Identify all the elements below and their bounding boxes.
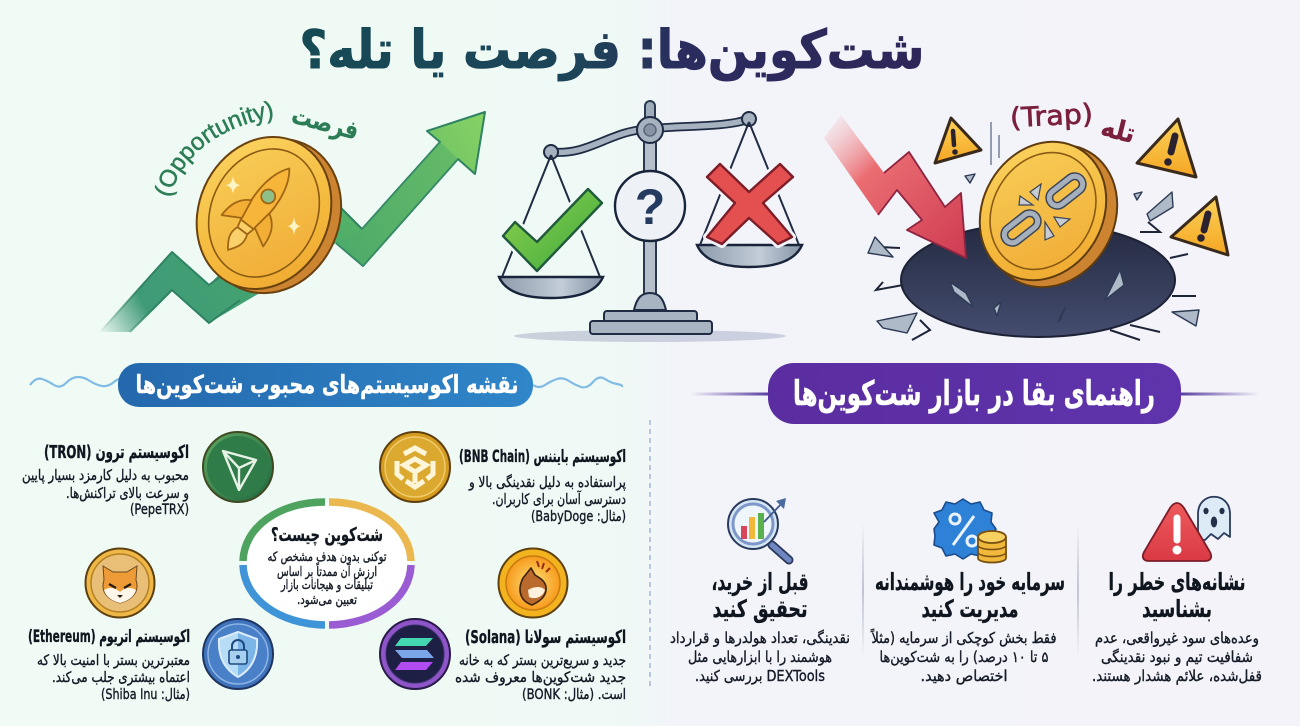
text: tron: محبوب به دلیل کارمزد بسیار پایین <box>22 468 189 484</box>
icon: ethereum shield coin <box>203 619 273 689</box>
right pan <box>697 245 802 267</box>
panel: manage capital: سرمایه خود را هوشمندانه <box>875 568 1065 596</box>
icon: bonk coin <box>498 548 568 618</box>
panel: manage capital: ۵ تا ۱۰ درصد) را به شت‌کوین‌ها <box>880 648 1048 666</box>
panel: recognize danger signs: وعده‌های سود غیرواقعی، عدم <box>1095 629 1259 647</box>
panel: what is a shitcoin: تبلیقات و هیجانات بازار <box>280 578 373 593</box>
panel: research before buying <box>670 498 850 685</box>
label: opportunity <box>154 100 362 196</box>
panel: what is a shitcoin: ارزش آن ممدتاً بر اساس <box>277 562 377 580</box>
icon: red cross <box>707 164 793 244</box>
icon: warning triangle 1 <box>935 118 981 163</box>
icon: danger triangle and ghost <box>1143 497 1230 561</box>
icon: balance scale with check, question and cross <box>499 101 802 342</box>
text: solana: جدید و سریع‌ترین بستر که به خانه <box>459 653 626 669</box>
icon: percent badge and coins <box>934 499 1006 562</box>
panel: what is a shitcoin: شت‌کوین چیست؟ <box>271 524 383 546</box>
text: ethereum: اکوسیستم اتریوم (Ethereum) <box>28 627 190 647</box>
heading: ecosystem map: نقشه اکوسیستم‌های محبوب شت‌کوین‌ها <box>136 370 518 400</box>
text: bnb: پراستفاده به دلیل نقدینگی بالا و <box>468 474 626 491</box>
icon: dark cracked hole <box>876 222 1196 340</box>
panel: manage capital: مدیریت کنید <box>922 595 1018 623</box>
text: ethereum: اعتماه بیشتری جلب می‌کند. <box>52 670 190 686</box>
icon: warning triangle 2 <box>1137 119 1196 177</box>
panel: opportunity illustration <box>100 100 486 333</box>
icon: tron coin <box>203 432 273 502</box>
panel: recognize danger signs <box>1092 497 1262 685</box>
icon: warning triangle 3 <box>1171 197 1228 255</box>
icon: rising green arrow <box>100 112 485 332</box>
text: tron: (PepeTRX) <box>130 502 189 518</box>
text: solana <box>455 627 626 703</box>
text: tron: اکوسیستم ترون (TRON) <box>44 442 189 463</box>
pan strings <box>502 122 799 277</box>
heading: ecosystem map <box>30 363 622 407</box>
panel: what is a shitcoin: توکنی بدون هدف مشخص که <box>268 550 387 565</box>
panel: recognize danger signs: قفل‌شده، علائم هشدار هستند. <box>1092 667 1262 685</box>
text: tron <box>22 442 189 518</box>
broken chain <box>1001 173 1086 246</box>
title: شت‌کوین‌ها: فرصت یا تله؟ <box>300 20 924 81</box>
icon: check mark <box>503 189 602 271</box>
icon: solana coin <box>380 619 450 689</box>
panel: research before buying: قبل از خرید، <box>712 568 808 596</box>
label: opportunity: فرصت <box>288 100 362 147</box>
scale beam <box>551 119 749 152</box>
icon: shards <box>868 174 1199 333</box>
scale pole <box>644 120 656 300</box>
text: solana: است. (مثال: BONK) <box>522 687 626 703</box>
panel: what is a shitcoin <box>243 502 411 625</box>
scale base <box>590 293 712 334</box>
heading: survival guide <box>690 363 1259 424</box>
text: bnb <box>459 447 626 525</box>
panel: research before buying: نقدینگی، تعداد هولدرها و قرارداد <box>670 629 850 647</box>
panel: manage capital: فقط بخش کوچکی از سرمایه (مثلاً <box>870 628 1056 647</box>
panel: what is a shitcoin: تعبین می‌شود. <box>297 593 357 608</box>
left pan <box>499 277 603 298</box>
panel: recognize danger signs: شفافیت تیم و نبود نقدینگی <box>1101 648 1253 666</box>
text: solana: جدید شت‌کوین‌ها معروف شده <box>455 670 626 686</box>
scale shadow <box>514 330 786 342</box>
icon: falling red arrow <box>824 115 966 258</box>
label: trap <box>1009 99 1138 150</box>
label: trap: تله <box>1098 112 1138 150</box>
panel: research before buying: هوشمند را با ابزارهایی مثل <box>688 648 832 666</box>
panel: research before buying: DEXTools بررسی کنید. <box>695 667 825 685</box>
question circle <box>615 171 685 241</box>
panel: trap illustration <box>824 99 1228 340</box>
icon: shiba coin <box>86 548 154 618</box>
text: bnb: اکوسیستم بایننس (BNB Chain) <box>459 447 626 467</box>
icon: gold coin with rocket <box>173 115 365 315</box>
text: bnb: (مثال: BabyDoge) <box>531 509 626 525</box>
scale finial <box>645 101 655 125</box>
question circle: ? <box>635 179 665 235</box>
icon: bnb coin <box>380 432 450 502</box>
motion lines <box>991 122 999 165</box>
panel: manage capital: اختصاص دهید. <box>920 667 1008 685</box>
text: bnb: دسترسی آسان برای کاربران. <box>492 490 626 508</box>
text: ethereum <box>28 627 190 703</box>
text: ethereum: (مثال: Shiba Inu) <box>101 687 190 703</box>
text: ethereum: معتبرترین بستر با امنیت بالا که <box>37 653 190 669</box>
text: tron: و سرعت بالای تراکنش‌ها. <box>66 486 189 502</box>
divider <box>649 420 651 690</box>
label: opportunity: (Opportunity) <box>154 100 273 196</box>
icon: gold coin with broken chain <box>955 119 1143 311</box>
panel: manage capital <box>870 499 1065 685</box>
panel: research before buying: تحقیق کنید <box>712 595 808 623</box>
icon: magnifier chart <box>728 498 789 560</box>
label: trap: (Trap) <box>1009 99 1094 134</box>
text: solana: اکوسیستم سولانا (Solana) <box>465 627 626 648</box>
panel: recognize danger signs: بشناسید <box>1142 595 1212 623</box>
